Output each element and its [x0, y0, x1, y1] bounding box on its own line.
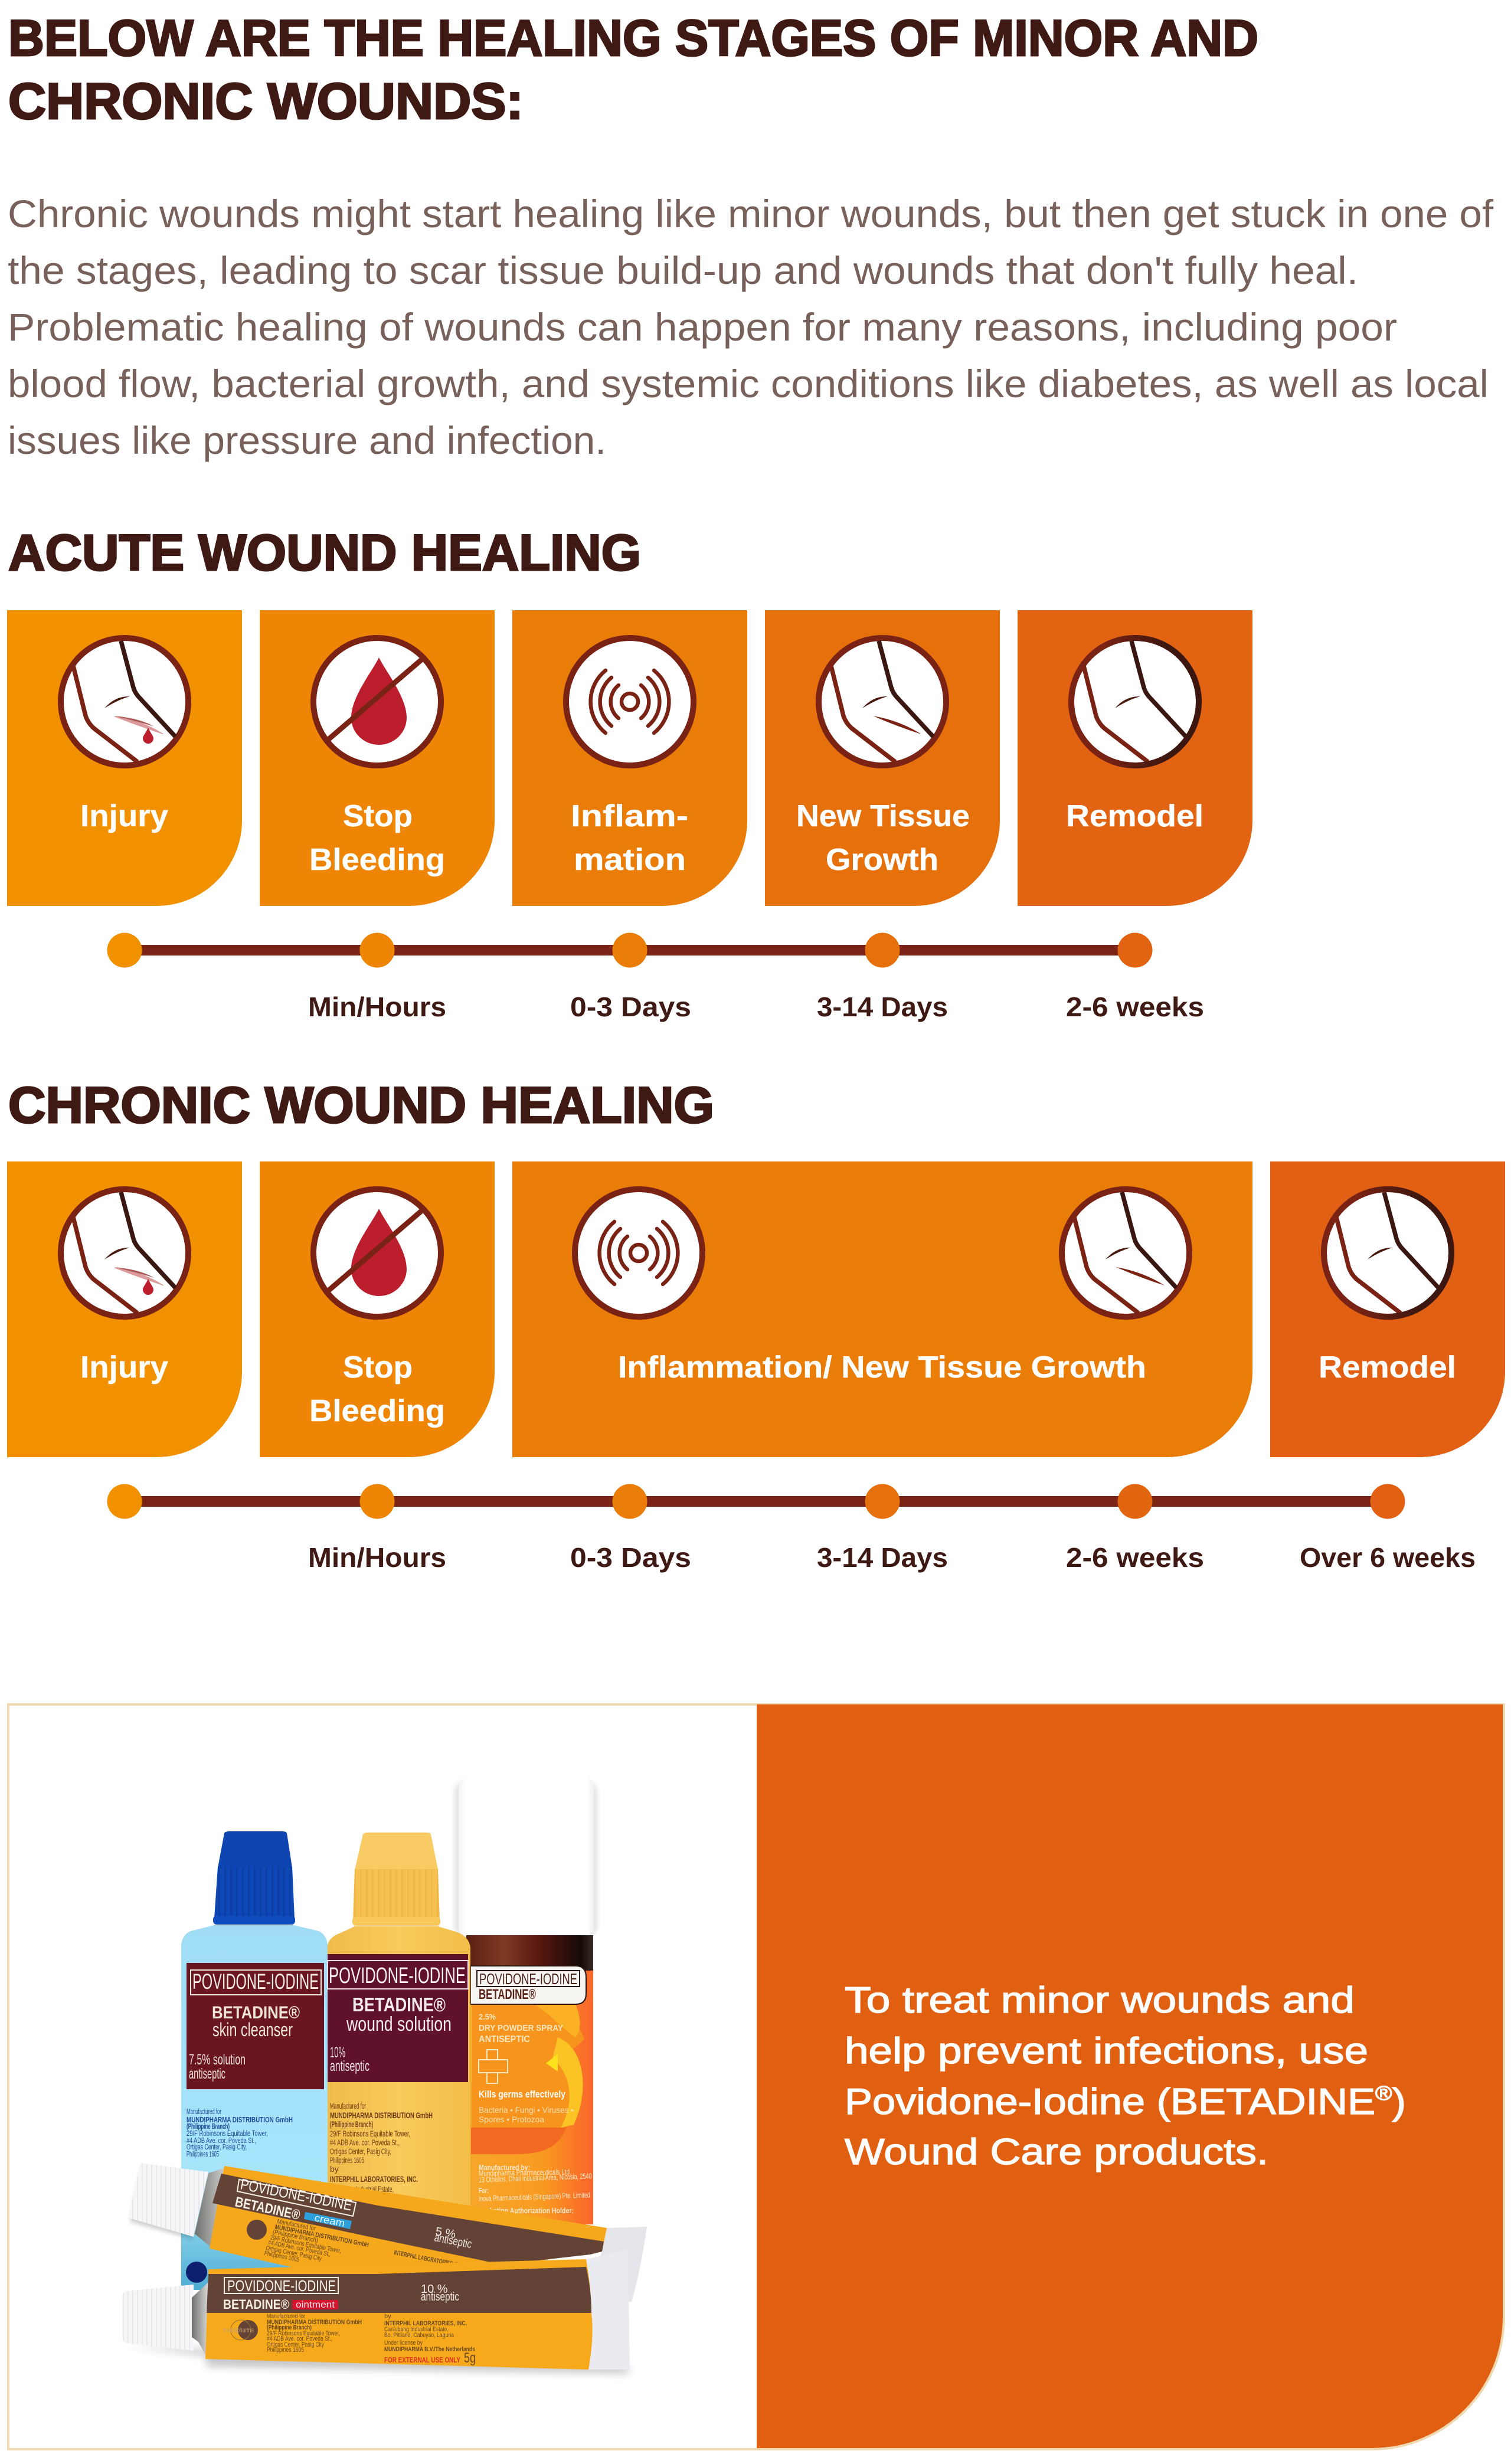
label: new tissue growth: [796, 799, 970, 877]
product: betadine wound solution bottle: by: [330, 2164, 339, 2174]
product: betadine ointment tube: #4 ADB Ave. cor. Poveda St.,: [267, 2335, 332, 2342]
product: dry powder spray can: Spores • Protozoa: [479, 2115, 544, 2124]
product: betadine ointment tube: BETADINE®: [223, 2297, 289, 2312]
icon: injured elbow: [61, 1189, 188, 1317]
timeline: acute: [107, 932, 1152, 968]
product: dry powder spray can: 13 Othellos, Dhali Industrial Area, Nicosia, 2540: [479, 2171, 592, 2184]
icon: healed elbow: [1324, 1189, 1451, 1317]
product: betadine ointment tube: Manufactured for: [267, 2313, 305, 2320]
panel: acute stage injury: [7, 610, 242, 906]
label: stop bleeding: [309, 799, 445, 877]
product: betadine ointment tube: 29/F Robinsons Equitable Tower,: [267, 2330, 340, 2337]
product: betadine ointment tube: Canlubang Industrial Estate,: [384, 2326, 449, 2333]
product: betadine ointment tube: by: [384, 2313, 391, 2320]
product: betadine skin cleanser bottle: 7.5% solution: [189, 2051, 246, 2068]
product: betadine wound solution bottle: POVIDONE-IODINE: [329, 1964, 466, 1988]
product: betadine cream tube: Manufactured for: [276, 2218, 316, 2233]
label: new tissue growth: New Tissue: [796, 799, 970, 833]
product: betadine ointment tube: (Philippine Branch): [267, 2324, 312, 2331]
product: betadine cream tube: BETADINE®: [234, 2194, 302, 2223]
product: betadine skin cleanser bottle: skin cleanser: [212, 2019, 293, 2040]
label: new tissue growth: Growth: [826, 843, 938, 877]
icon: injured elbow: [61, 638, 188, 765]
product: betadine wound solution bottle: Canlubang Industrial Estate,: [330, 2184, 394, 2194]
product: betadine ointment tube: Under license by: [384, 2339, 423, 2347]
icon: inflammation signal: [566, 638, 694, 765]
intro paragraph: blood flow, bacterial growth, and systemic conditions like diabetes, as well as local: [8, 362, 1489, 405]
icon: blood drop crossed out: [313, 638, 441, 765]
timeline labels: acute: [308, 992, 1204, 1022]
product: betadine skin cleanser bottle: antiseptic: [189, 2066, 225, 2082]
panel: acute stage inflammation: [512, 610, 747, 906]
product: betadine wound solution bottle: INTERPHIL LABORATORIES, INC.: [330, 2174, 418, 2184]
icon: healed elbow: [1071, 638, 1199, 765]
callout text: help prevent infections, use: [845, 2031, 1368, 2072]
label: inflammation and new tissue growth: Inflammation/ New Tissue Growth: [618, 1350, 1146, 1385]
product: betadine ointment tube: ointment: [296, 2300, 335, 2310]
product: betadine skin cleanser bottle: MUNDIPHARMA DISTRIBUTION GmbH: [187, 2115, 293, 2124]
product: betadine ointment tube: mundipharma: [223, 2326, 254, 2334]
label: inflammation: mation: [574, 843, 686, 877]
product: betadine cream tube: 5 %: [434, 2225, 457, 2241]
product: betadine ointment tube: POVIDONE-IODINE: [227, 2277, 336, 2295]
product: betadine skin cleanser bottle: 29/F Robinsons Equitable Tower,: [187, 2129, 268, 2138]
label: remodel: Remodel: [1319, 1350, 1456, 1385]
product: betadine skin cleanser bottle: BETADINE®: [212, 2003, 300, 2023]
timeline labels: chronic: Over 6 weeks: [1300, 1542, 1476, 1573]
callout text: Povidone-Iodine (BETADINE: [845, 2082, 1312, 2122]
timeline labels: acute: Min/Hours: [308, 992, 446, 1022]
main heading: BELOW ARE THE HEALING STAGES OF MINOR AND: [8, 10, 1258, 67]
main heading: [8, 10, 1258, 130]
panel: acute stage new tissue growth: [765, 610, 1000, 906]
main heading: CHRONIC WOUNDS:: [8, 73, 524, 130]
label: stop bleeding: Bleeding: [309, 843, 445, 877]
heading: acute wound healing: ACUTE WOUND HEALING: [8, 525, 641, 581]
timeline labels: acute: 0-3 Days: [570, 992, 691, 1022]
product: betadine wound solution bottle: 10%: [330, 2044, 345, 2061]
timeline labels: chronic: [308, 1542, 1476, 1573]
product: betadine skin cleanser bottle: #4 ADB Ave. cor. Poveda St.,: [187, 2136, 256, 2145]
heading: chronic wound healing: CHRONIC WOUND HEALING: [8, 1077, 714, 1134]
icon: elbow with closing wound: [819, 638, 946, 765]
product: betadine skin cleanser bottle: (Philippine Branch): [187, 2122, 230, 2131]
callout text: To treat minor wounds and: [845, 1980, 1355, 2021]
product: betadine cream tube: antiseptic: [433, 2231, 473, 2251]
icon: elbow with closing wound: [1062, 1189, 1189, 1317]
product: dry powder spray can: Mundipharma Pharmaceuticals Ltd.: [479, 2167, 571, 2178]
product: dry powder spray can: Inova Pharmaceuticals (Singapore) Pte. Limited: [479, 2190, 590, 2203]
product: betadine cream tube: 29/F Robinsons Equitable Tower,: [270, 2234, 342, 2255]
panel: orange callout background: [757, 1704, 1503, 2448]
product: betadine wound solution bottle: BETADINE®: [352, 1994, 446, 2015]
product: betadine wound solution bottle: 29/F Robinsons Equitable Tower,: [330, 2129, 410, 2138]
label: remodel: Remodel: [1066, 799, 1203, 833]
product: betadine wound solution bottle: antiseptic: [330, 2058, 369, 2074]
product: dry powder spray can: POVIDONE-IODINE: [479, 1970, 577, 1988]
panel: chronic stage stop bleeding: [260, 1161, 495, 1457]
product: dry powder spray can: [454, 1778, 597, 2224]
product: dry powder spray can: Marketing Authorization Holder:: [479, 2206, 574, 2215]
product: betadine cream tube: Ortigas Center, Pasig City: [265, 2244, 322, 2263]
timeline labels: chronic: Min/Hours: [308, 1542, 446, 1573]
label: stop bleeding: Stop: [343, 799, 413, 833]
product: betadine ointment tube: [122, 2250, 630, 2374]
product: dry powder spray can: Manufactured by:: [479, 2163, 530, 2172]
timeline: chronic: [107, 1484, 1405, 1519]
product: betadine wound solution bottle: wound solution: [346, 2013, 452, 2036]
product: betadine cream tube: INTERPHIL LABORATORIES, INC.: [393, 2249, 465, 2270]
product: betadine wound solution bottle: (Philippine Branch): [330, 2119, 373, 2129]
icon: blood drop crossed out: [313, 1189, 441, 1317]
product: betadine ointment tube: INTERPHIL LABORATORIES, INC.: [384, 2320, 467, 2327]
panel: chronic stage injury: [7, 1161, 242, 1457]
product: betadine skin cleanser bottle: Manufactured for: [187, 2107, 221, 2116]
product: betadine skin cleanser bottle: POVIDONE-IODINE: [192, 1969, 319, 1994]
product: betadine wound solution bottle: Ortigas Center, Pasig City,: [330, 2146, 391, 2156]
icon: inflammation signal: [575, 1189, 702, 1317]
product: betadine wound solution bottle: Philippines 1605: [330, 2155, 364, 2165]
timeline labels: chronic: 0-3 Days: [570, 1542, 691, 1573]
panel: acute stage stop bleeding: [260, 610, 495, 906]
product: dry powder spray can: Bacteria • Fungi • Viruses •: [479, 2105, 574, 2115]
callout text: ): [1392, 2082, 1406, 2122]
product: dry powder spray can: BETADINE®: [479, 1987, 536, 2002]
timeline labels: acute: 3-14 Days: [817, 992, 948, 1022]
product: betadine skin cleanser bottle: Philippines 1605: [187, 2149, 219, 2158]
callout text: Wound Care products.: [845, 2132, 1268, 2172]
product: betadine ointment tube: 10 %: [421, 2283, 448, 2296]
label: stop bleeding: [309, 1350, 445, 1428]
product: dry powder spray can: DRY POWDER SPRAY: [479, 2023, 563, 2033]
product: betadine wound solution bottle: Manufactured for: [330, 2101, 366, 2110]
product: betadine ointment tube: 5g: [464, 2350, 476, 2366]
product: betadine cream tube: [129, 2163, 647, 2302]
label: inflammation: [571, 799, 688, 877]
product: betadine wound solution bottle: MUNDIPHARMA DISTRIBUTION GmbH: [330, 2110, 433, 2120]
product: betadine cream tube: cream: [313, 2212, 346, 2229]
intro paragraph: Chronic wounds might start healing like minor wounds, but then get stuck in one of: [8, 192, 1494, 235]
product: betadine ointment tube: Philippines 1605: [267, 2347, 304, 2354]
panel: chronic stage remodel: [1270, 1161, 1505, 1457]
intro paragraph: issues like pressure and infection.: [8, 418, 606, 462]
product: dry powder spray can: ANTISEPTIC: [479, 2034, 530, 2044]
product: betadine ointment tube: MUNDIPHARMA DISTRIBUTION GmbH: [267, 2319, 362, 2326]
label: stop bleeding: Bleeding: [309, 1394, 445, 1428]
product: betadine ointment tube: Ortigas Center, Pasig City: [267, 2341, 324, 2348]
timeline labels: chronic: 3-14 Days: [817, 1542, 948, 1573]
product: dry powder spray can: Kills germs effectively: [479, 2089, 565, 2100]
label: stop bleeding: Stop: [343, 1350, 413, 1385]
product: betadine ointment tube: FOR EXTERNAL USE ONLY: [384, 2355, 460, 2364]
product: betadine cream tube: POVIDONE-IODINE: [239, 2175, 354, 2214]
product: dry powder spray can: 2.5%: [479, 2012, 496, 2021]
product: betadine cream tube: Philippines 1605: [264, 2250, 300, 2263]
product: betadine skin cleanser bottle: [181, 1831, 328, 2290]
product: betadine wound solution bottle: #4 ADB Ave. cor. Poveda St.,: [330, 2138, 400, 2147]
product: betadine skin cleanser bottle: Ortigas Center, Pasig City,: [187, 2142, 247, 2151]
callout text: [845, 1980, 1406, 2172]
product: dry powder spray can: For:: [479, 2186, 489, 2195]
label: injury: Injury: [80, 1350, 168, 1385]
product: betadine ointment tube: Bo. Pittland, Cabuyao, Laguna: [384, 2332, 454, 2339]
panel: chronic stage inflammation and new tissue growth: [512, 1161, 1252, 1457]
timeline labels: acute: 2-6 weeks: [1066, 992, 1204, 1022]
product: betadine cream tube: (Philippine Branch): [272, 2229, 319, 2244]
intro paragraph: Problematic healing of wounds can happen for many reasons, including poor: [8, 305, 1397, 349]
product: betadine cream tube: #4 ADB Ave. cor. Poveda St.,: [267, 2239, 332, 2258]
label: inflammation: Inflam-: [571, 799, 688, 833]
product: betadine cream tube: MUNDIPHARMA DISTRIBUTION GmbH: [274, 2224, 369, 2249]
intro paragraph: the stages, leading to scar tissue build-up and wounds that don't fully heal.: [8, 248, 1358, 292]
panel: acute stage remodel: [1018, 610, 1252, 906]
timeline labels: chronic: 2-6 weeks: [1066, 1542, 1204, 1573]
intro paragraph: [8, 192, 1494, 462]
product: betadine ointment tube: antiseptic: [421, 2290, 459, 2303]
product: betadine wound solution bottle: [328, 1833, 470, 2243]
callout text: ®: [1375, 2082, 1392, 2105]
product: betadine ointment tube: MUNDIPHARMA B.V./The Netherlands: [384, 2346, 475, 2353]
panel: product promotion: [8, 1704, 1504, 2449]
label: injury: Injury: [80, 799, 168, 833]
